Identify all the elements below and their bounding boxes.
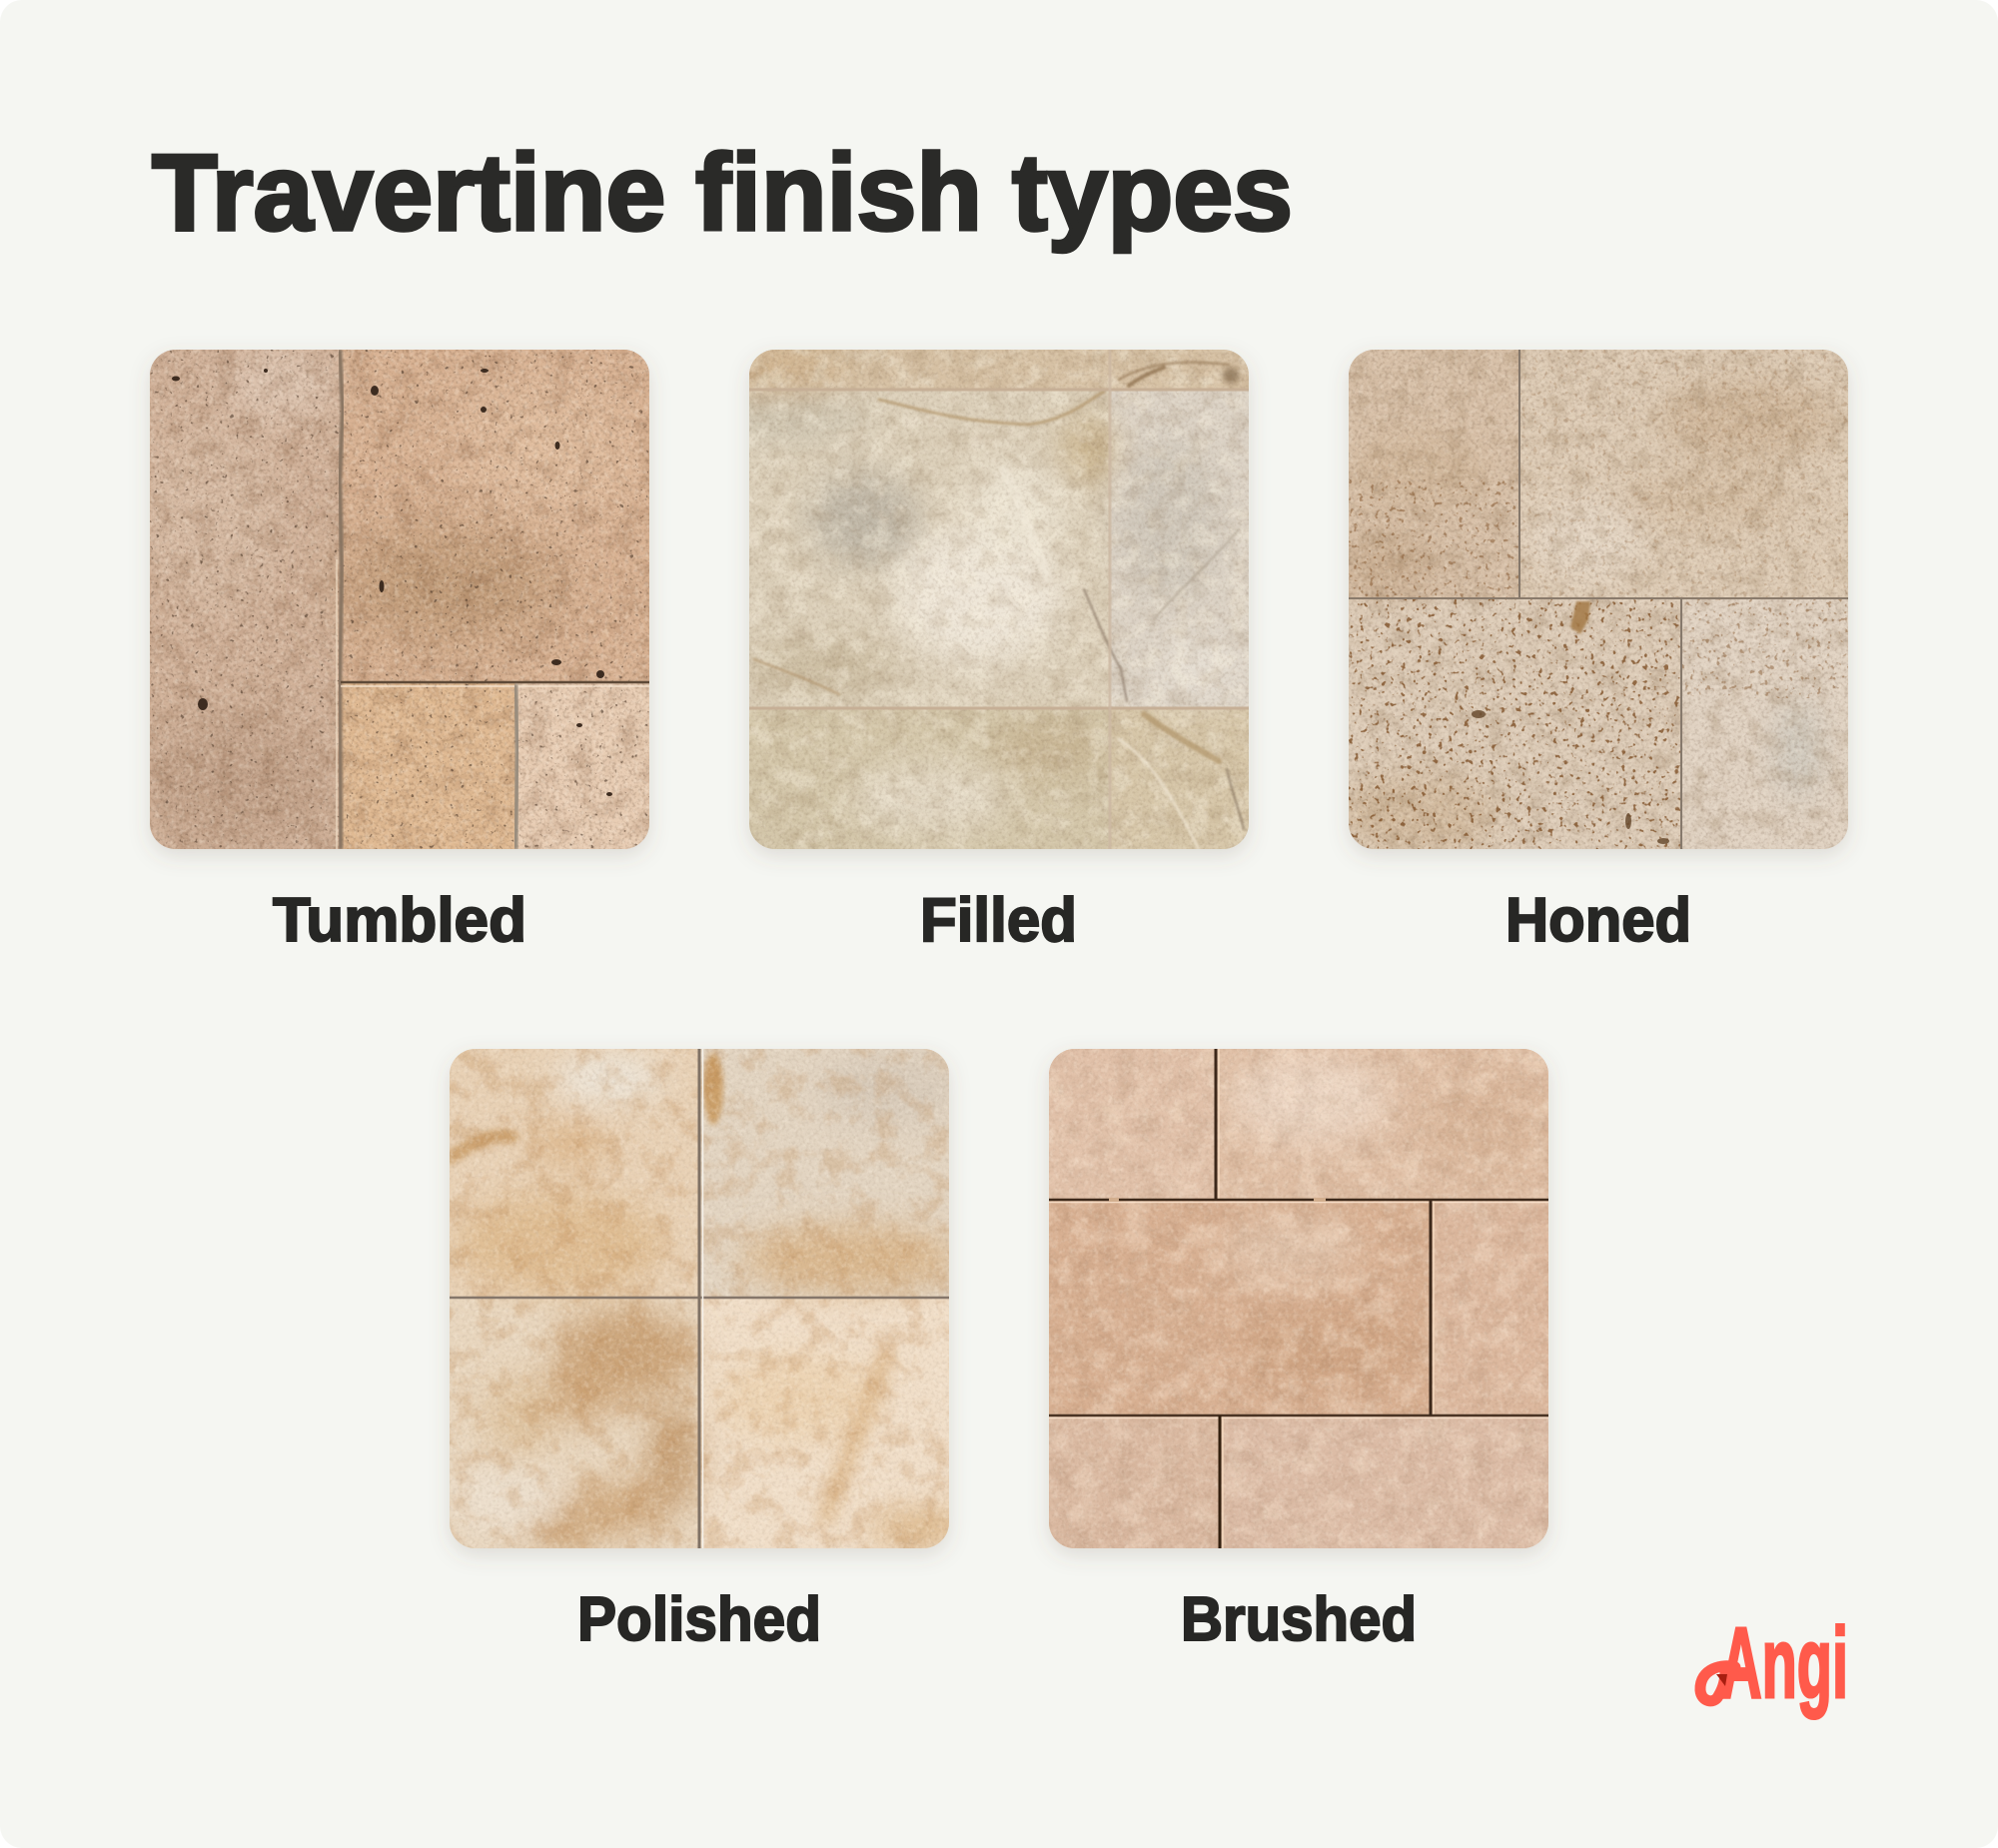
photo: filled travertine tiles	[709, 348, 1249, 849]
label: Brushed: Brushed	[1181, 1585, 1417, 1654]
label: Tumbled: Tumbled	[273, 886, 526, 955]
photo: polished travertine tiles	[450, 1049, 977, 1551]
tile shadow	[1049, 1049, 1548, 1548]
photo: tumbled travertine tiles	[140, 347, 649, 849]
panel: Filled finish	[709, 348, 1249, 955]
label: Polished: Polished	[577, 1585, 821, 1654]
tile shadow	[450, 1049, 949, 1548]
tile shadow	[150, 350, 649, 849]
photo: honed travertine tiles	[1339, 350, 1848, 854]
label: Filled: Filled	[920, 886, 1077, 955]
photo: brushed travertine tiles	[1049, 1049, 1558, 1548]
panel: Tumbled finish	[140, 347, 649, 955]
panel: Brushed finish	[1049, 1049, 1558, 1654]
tile shadow	[749, 350, 1249, 849]
logo swash loop	[1700, 1666, 1735, 1701]
logo wordmark: Angi	[1720, 1607, 1848, 1719]
logo swash shadow	[1716, 1674, 1727, 1686]
label: Honed: Honed	[1505, 886, 1691, 955]
panel: Polished finish	[450, 1049, 977, 1654]
logo: Angi	[1700, 1607, 1848, 1719]
tile shadow	[1349, 350, 1848, 849]
title: Travertine finish types	[152, 132, 1293, 254]
panel: Honed finish	[1339, 350, 1848, 955]
